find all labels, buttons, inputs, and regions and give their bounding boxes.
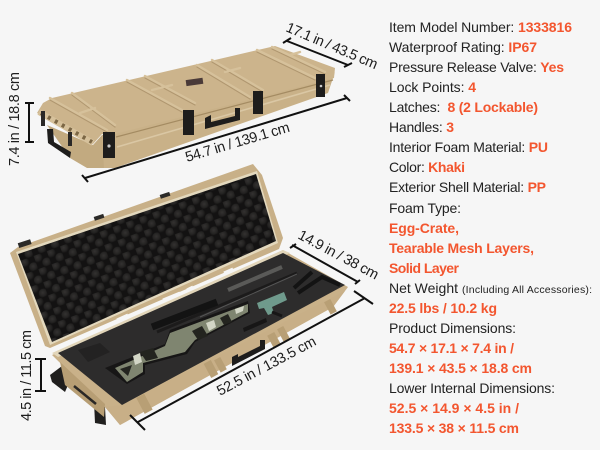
specification list: Interior Foam Material: PU (389, 139, 548, 155)
specification list: Pressure Release Valve: Yes (389, 59, 564, 75)
base handle (232, 340, 265, 366)
logo (186, 78, 203, 86)
front handle (205, 108, 240, 129)
end teeth (39, 112, 93, 143)
specification list: Lock Points: 4 (389, 79, 476, 95)
latches (103, 74, 325, 158)
specification list: 22.5 lbs / 10.2 kg (389, 300, 497, 316)
specification list: Solid Layer (389, 260, 460, 276)
specification list: Color: Khaki (389, 159, 465, 175)
specification list (389, 19, 592, 436)
dimension: internal height: 4.5 in / 11.5 cm (19, 330, 35, 421)
egg-crate lid foam (18, 174, 276, 342)
specification list: Tearable Mesh Layers, (389, 240, 534, 256)
rifle stock camo (115, 304, 248, 382)
specification list: Item Model Number: 1333816 (389, 19, 572, 35)
case left end (47, 125, 104, 168)
case front side (102, 72, 335, 168)
open case photo (10, 164, 348, 425)
lid latches (18, 192, 170, 248)
specification list: 52.5 × 14.9 × 4.5 in / (389, 400, 519, 416)
side tabs (136, 299, 337, 414)
specification list: Waterproof Rating: IP67 (389, 39, 537, 55)
dimension: internal length (130, 291, 373, 430)
case lid top (37, 46, 335, 144)
dimension: internal length: 52.5 in / 133.5 cm (214, 334, 319, 400)
closed case photo (37, 46, 335, 168)
foam accessory square (78, 343, 110, 362)
hinge gaps (90, 269, 233, 333)
base shell (52, 250, 348, 425)
specification list: 54.7 × 17.1 × 7.4 in / (389, 340, 514, 356)
dimension: internal width: 14.9 in / 38 cm (295, 227, 381, 283)
specification list: 139.1 × 43.5 × 18.8 cm (389, 360, 532, 376)
rifle cutout (105, 301, 250, 384)
specification list: Handles: 3 (389, 119, 454, 135)
base foam (58, 253, 345, 405)
dimension: closed case height (7, 72, 34, 166)
specification list: Latches: 8 (2 Lockable) (389, 99, 538, 115)
specification list: (Including All Accessories): (462, 284, 592, 296)
dimension: internal height (19, 330, 46, 421)
base end panel (60, 362, 105, 417)
dimension: closed case depth: 17.1 in / 43.5 cm (283, 20, 380, 73)
specification list: Net Weight (389, 280, 458, 296)
specification list: Exterior Shell Material: PP (389, 179, 546, 195)
specification list: Lower Internal Dimensions: (389, 380, 555, 396)
dimension: closed case length: 54.7 in / 139.1 cm (184, 120, 292, 166)
lid ribs (50, 49, 325, 132)
specification list: Foam Type: (389, 200, 461, 216)
scope (152, 302, 217, 327)
magazine slot (243, 318, 267, 332)
lid shell (10, 164, 283, 348)
barrels (228, 267, 282, 290)
dimension: closed case height: 7.4 in / 18.8 cm (7, 72, 23, 166)
dimension: closed case length (82, 95, 350, 182)
specification list: Product Dimensions: (389, 320, 516, 336)
specification list: 133.5 × 38 × 11.5 cm (389, 420, 519, 436)
specification list: Egg-Crate, (389, 220, 459, 236)
wheels (50, 366, 68, 392)
end handle (47, 129, 71, 158)
bipod (294, 272, 340, 293)
green part (257, 292, 287, 315)
